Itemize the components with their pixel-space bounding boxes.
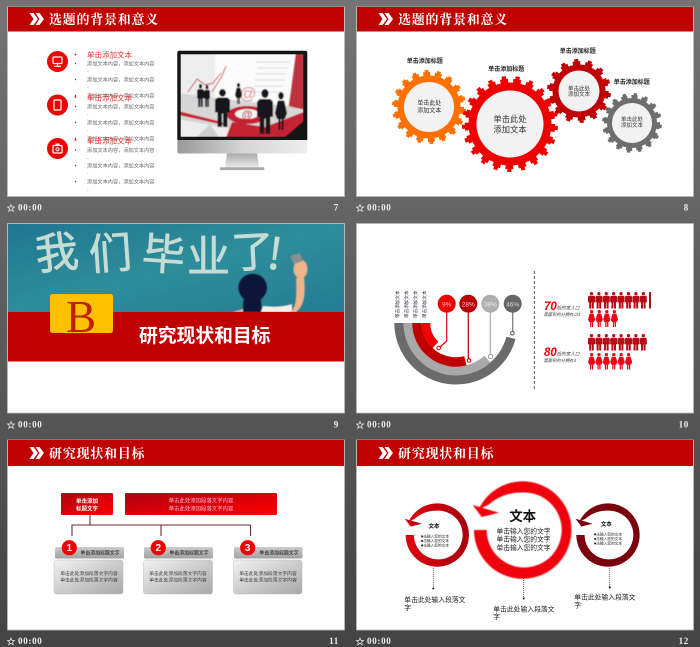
card 1: 1	[67, 543, 73, 554]
paragraph: left: 字	[404, 603, 411, 612]
text list: item 3: -	[87, 188, 89, 194]
paragraph: middle	[493, 604, 555, 621]
card 3: 单击添加标题文字	[259, 550, 299, 556]
card 1: 单击添加标题文字	[80, 550, 120, 556]
connector lines	[72, 515, 250, 536]
footer: slide 11 time: 00:00	[18, 636, 42, 646]
card 3	[234, 540, 302, 594]
statistic: 80: 黑面积的分拥有4	[544, 358, 577, 363]
footer: slide 12 time: 00:00	[367, 636, 392, 646]
text list: item 2: -	[87, 112, 89, 118]
center text: left ring: ■击输入您的文本	[421, 534, 449, 539]
dotted leader: left	[432, 568, 434, 590]
center text: right ring: ■击输入您的文本	[594, 536, 622, 541]
panel: slide 11 org chart	[8, 440, 344, 646]
red band	[8, 312, 344, 362]
statistic: 70: 黑面积的分拥有以4	[544, 312, 581, 317]
center text: left ring: ■击输入您的文本	[421, 542, 449, 547]
letter badge B	[50, 292, 113, 342]
dotted leader: right	[609, 568, 611, 588]
paragraph: left: 单击此处输入段落文	[404, 595, 466, 604]
header bar: slide 7: 选题的背景和意义	[49, 12, 159, 27]
card 2	[144, 540, 213, 594]
panel: slide 10 charts	[356, 224, 694, 430]
page number: 12: 12	[679, 636, 689, 646]
gear: dark red: 单击此处	[568, 84, 590, 92]
text list: item 3: 添加文本内容，添加文本内容	[87, 162, 154, 170]
paragraph: middle: 单击此处输入段落文	[493, 604, 555, 614]
statistic: 80: 后的家人口	[556, 352, 580, 356]
header bar: slide 8	[357, 7, 693, 32]
text list: item 1: 添加文本内容，添加文本内容	[87, 75, 154, 83]
pictogram: 70 people rows	[588, 292, 651, 327]
vertical labels: 单击添加文本	[412, 290, 419, 318]
statistic: 70: 后的家人口	[556, 306, 580, 310]
card 3: 3	[245, 543, 251, 554]
panel: slide 8 gears	[356, 7, 694, 212]
gear: dark red	[548, 60, 610, 122]
center text: left ring: ■击输入您的文本	[421, 538, 449, 543]
icon: camera	[47, 138, 68, 159]
gear: dark red: 添加文本	[568, 90, 590, 98]
page number: 8: 8	[684, 202, 689, 212]
statistic: 80	[544, 347, 580, 363]
gear: red large: 单击此处	[493, 114, 527, 124]
pictogram: 80 people rows	[588, 334, 647, 370]
center text: right ring: ■击输入您的文本	[594, 541, 622, 546]
gear: gray: 单击此处	[621, 115, 643, 123]
text list: item 3: 单击添加文本	[87, 136, 132, 146]
center text: right ring: 文本	[601, 520, 612, 528]
circular arrow: right	[576, 503, 640, 567]
icon: monitor	[47, 51, 68, 72]
card 1	[54, 540, 124, 594]
paragraph: left	[404, 595, 466, 612]
footer: slide 9 time: 00:00	[18, 420, 42, 430]
center text: left ring	[421, 522, 449, 547]
statistic: 80: 80	[544, 347, 557, 359]
image: chalkboard with student: 我们毕业了!	[32, 217, 287, 285]
center text: large ring: 单击输入您的文字	[496, 543, 551, 552]
card 2: 单击此处添加段落文字内容	[149, 576, 207, 584]
text list: item 1: 添加文本内容，添加文本内容	[87, 59, 154, 67]
text list: item 3: -	[87, 156, 89, 162]
text list: item 3: -	[87, 171, 89, 177]
callout: 46%: 46%	[506, 302, 519, 308]
card 2: 2	[156, 543, 162, 554]
callout: 9%	[437, 295, 456, 350]
image: chalkboard with student	[8, 217, 344, 312]
text list: item 2: 添加文本内容，添加文本内容	[87, 118, 154, 126]
header bar: slide 12	[357, 440, 693, 466]
summary box	[125, 493, 277, 515]
center text: right ring	[594, 520, 622, 546]
text list: item 3: 添加文本内容，添加文本内容	[87, 146, 154, 154]
gear: orange: 添加文本	[417, 106, 441, 114]
page number: 10: 10	[679, 420, 689, 430]
image: desktop monitor with business people: @	[239, 84, 257, 103]
paragraph: right	[574, 592, 636, 610]
card 2: 单击添加标题文字	[169, 550, 209, 556]
text list: item 1: 单击添加文本	[87, 50, 132, 60]
gear: red large: 添加文本	[493, 124, 527, 134]
callout: 9%: 9%	[442, 302, 452, 308]
text list: item 1	[75, 50, 154, 99]
callout: 38%: 38%	[484, 302, 497, 308]
panel: slide 7	[8, 7, 344, 212]
icon: tablet	[47, 94, 68, 116]
text list: item 2: 添加文本内容，添加文本内容	[87, 134, 154, 142]
page number: 11: 11	[329, 636, 339, 646]
center text: large ring: 文本	[509, 508, 537, 524]
gear: orange	[394, 72, 464, 142]
center text: large ring: 单击输入您的文字	[496, 534, 551, 544]
text list: item 2	[75, 93, 154, 142]
image: desktop monitor with business people: @	[242, 109, 253, 121]
footer: slide 10 time: 00:00	[367, 420, 392, 430]
gear: gray: 添加文本	[621, 121, 643, 129]
summary box: 单击此处添加段落文字内容	[169, 496, 234, 504]
title box: 标题文字	[76, 504, 98, 512]
gear label: red: 单击添加标题	[488, 65, 524, 73]
section title: 研究现状和目标	[139, 324, 271, 346]
header bar: slide 11: 研究现状和目标	[49, 446, 146, 461]
title box: 单击添加	[76, 497, 98, 505]
text list: item 2: -	[87, 128, 89, 134]
text list: item 2: 单击添加文本	[87, 93, 132, 103]
statistic: 70	[544, 301, 581, 317]
center text: large ring: 单击输入您的文字	[496, 526, 551, 536]
circular arrow: left	[405, 503, 469, 567]
gear label: dark red: 单击添加标题	[560, 47, 596, 55]
summary box: 单击此处添加段落文字内容	[169, 504, 234, 512]
center text: right ring: ■击输入您的文本	[594, 531, 622, 536]
paragraph: right: 字	[574, 600, 581, 610]
callout: 28%	[459, 295, 477, 362]
text list: item 1: -	[87, 69, 89, 75]
text list: item 1: -	[87, 85, 89, 91]
callout: 38%	[481, 295, 499, 359]
card 1: 单击此处添加段落文字内容	[60, 570, 118, 577]
vertical labels: 单击添加文本	[403, 290, 410, 318]
header bar: slide 7	[8, 7, 344, 32]
gear label: gray: 单击添加标题	[614, 78, 650, 86]
title box	[61, 493, 113, 515]
statistic: 70: 70	[544, 301, 557, 313]
callout: 46%	[504, 295, 522, 335]
circular arrow: large	[473, 481, 571, 579]
callout: 28%: 28%	[462, 302, 475, 308]
text list: item 1: 添加文本内容，添加文本内容	[87, 91, 154, 99]
card 3: 单击此处添加段落文字内容	[239, 570, 297, 577]
vertical labels: 单击添加文本	[421, 290, 428, 318]
center text: large ring	[496, 508, 551, 552]
card 1: 单击此处添加段落文字内容	[60, 576, 118, 584]
panel: slide 9 section cover	[8, 217, 344, 430]
gear: orange: 单击此处	[417, 99, 441, 107]
center text: left ring: 文本	[428, 522, 440, 530]
card 2: 单击此处添加段落文字内容	[149, 570, 207, 577]
text list: item 2: 添加文本内容，添加文本内容	[87, 103, 154, 111]
header bar: slide 12: 研究现状和目标	[398, 446, 495, 461]
page number: 7: 7	[334, 202, 339, 212]
footer: slide 8 time: 00:00	[367, 202, 392, 212]
gear: gray	[604, 94, 660, 152]
paragraph: right: 单击此处输入段落文	[574, 592, 636, 602]
paragraph: middle: 字	[493, 612, 500, 621]
page number: 9: 9	[334, 420, 339, 430]
dotted leader: middle	[523, 578, 525, 600]
gear: red large	[464, 78, 556, 170]
gear label: orange: 单击添加标题	[407, 57, 443, 65]
text list: item 3: 添加文本内容，添加文本内容	[87, 177, 154, 185]
letter badge B: B	[66, 292, 96, 342]
chart: semicircle arcs	[399, 323, 511, 380]
card 3: 单击此处添加段落文字内容	[239, 576, 297, 584]
text list: item 3	[75, 136, 154, 194]
vertical labels: 单击添加文本	[394, 290, 401, 318]
header bar: slide 8: 选题的背景和意义	[398, 12, 508, 27]
header bar: slide 11	[8, 440, 344, 466]
image: desktop monitor with business people	[170, 44, 314, 170]
vertical labels	[394, 290, 428, 318]
footer: slide 7 time: 00:00	[18, 202, 42, 212]
panel: slide 12 circular arrows	[356, 440, 694, 646]
